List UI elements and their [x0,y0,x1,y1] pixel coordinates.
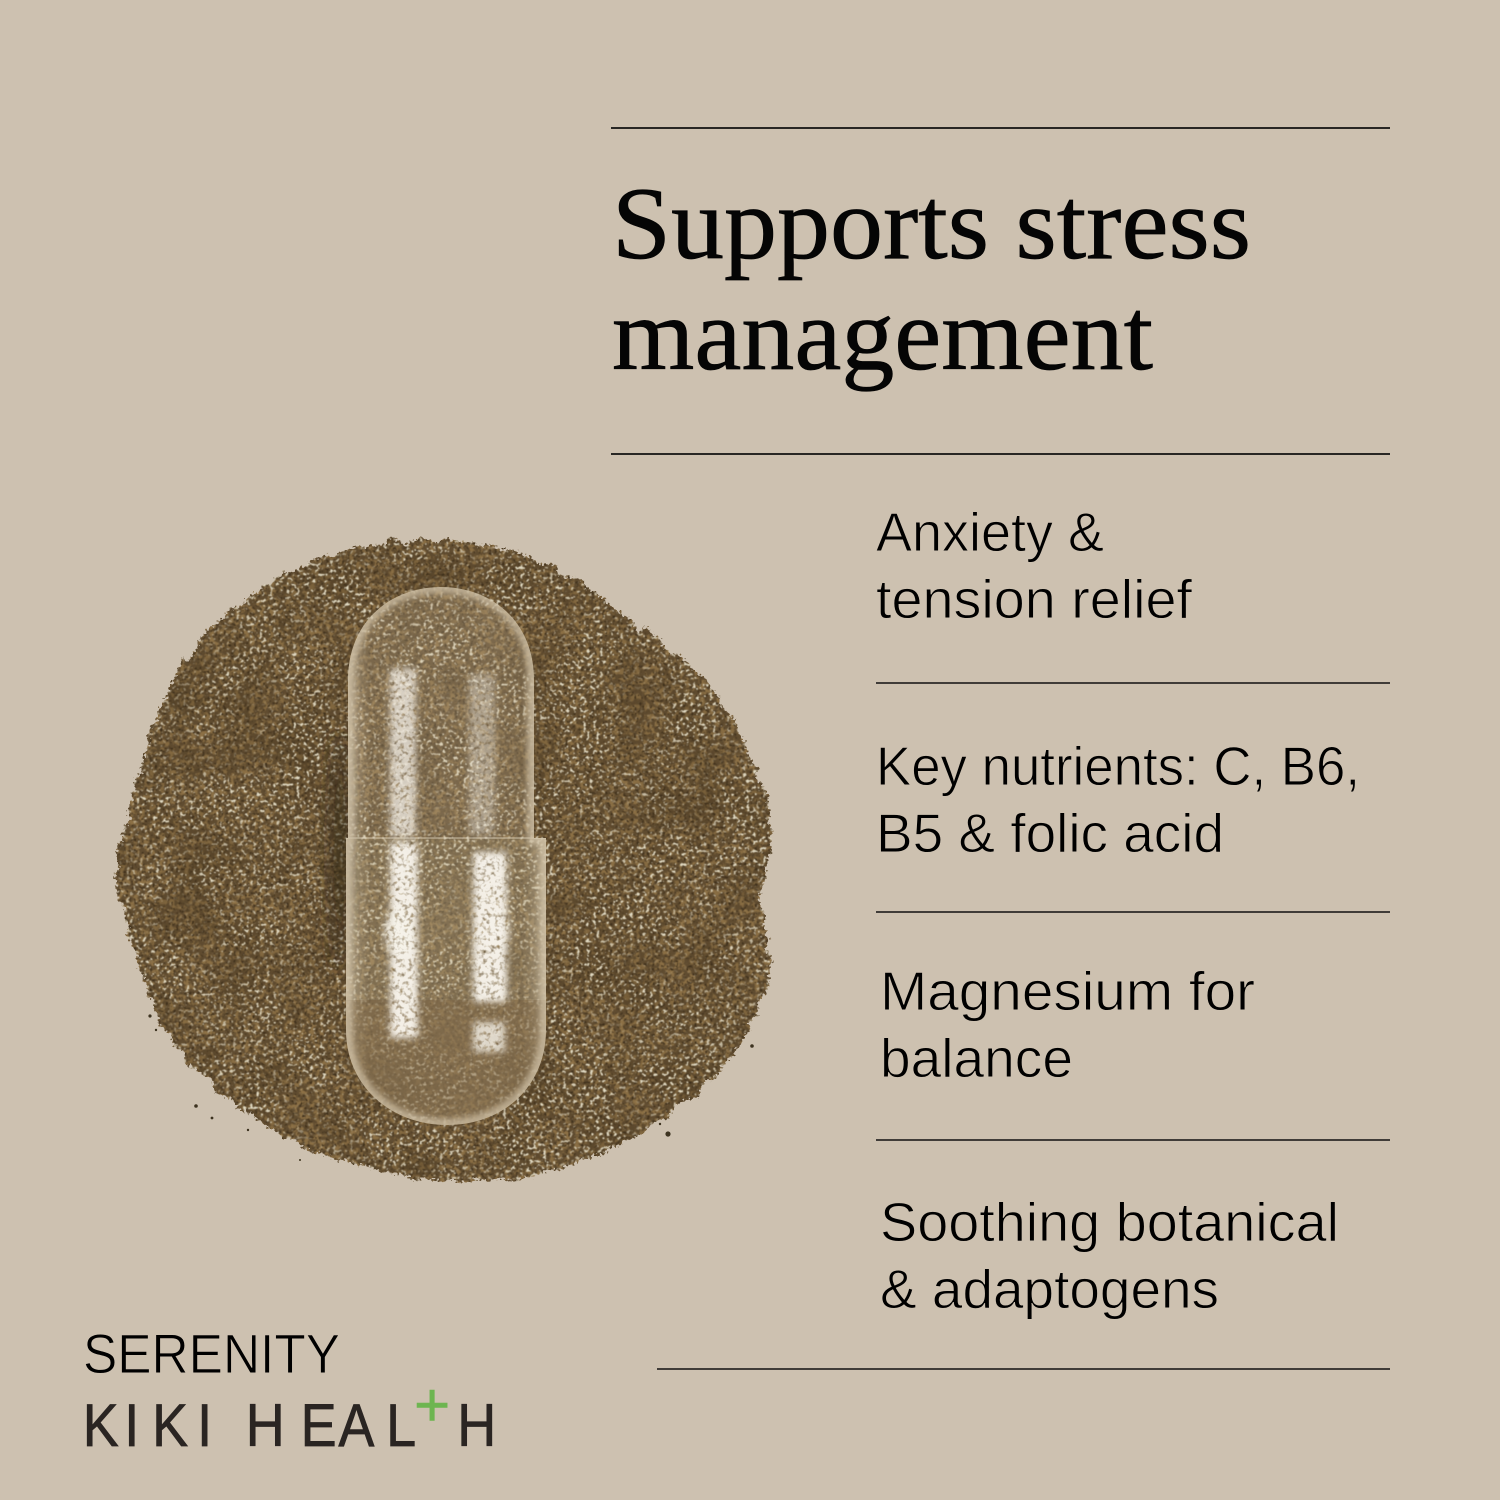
wordmark: H [457,1392,496,1460]
brand logo [83,1322,496,1460]
benefit: soothing botanical [880,1191,1339,1320]
benefit: magnesium [880,960,1255,1089]
benefit: magnesium: balance [880,1027,1073,1089]
benefit: soothing botanical: Soothing botanical [880,1191,1339,1253]
benefit: key nutrients: Key nutrients: C, B6, [876,735,1360,797]
powder pile with capsule [117,540,772,1181]
benefit: soothing botanical: & adaptogens [880,1258,1219,1320]
benefits list [657,501,1390,1369]
benefit: anxiety and tension relief [876,501,1193,630]
title: Supports stress [612,167,1251,281]
benefit: magnesium: Magnesium for [880,960,1255,1022]
capsule body [346,587,546,1125]
wordmark [83,1371,496,1460]
capsule highlights [384,668,510,1052]
benefit: anxiety and tension relief: Anxiety & [876,501,1104,563]
scattered grains [148,1014,754,1161]
benefit: key nutrients: B5 & folic acid [876,802,1224,864]
green plus: + [414,1371,450,1440]
heading panel [611,128,1390,454]
powder pile [117,540,772,1181]
wordmark: KIKIHEAL [83,1392,416,1460]
capsule [346,587,546,1125]
capsule rim [346,587,546,1125]
benefit: anxiety and tension relief: tension relief [876,568,1193,630]
benefit: key nutrients [876,735,1360,864]
capsule shadow [330,730,350,970]
title: management [612,278,1153,392]
product name: SERENITY [83,1322,340,1385]
title [612,167,1251,392]
